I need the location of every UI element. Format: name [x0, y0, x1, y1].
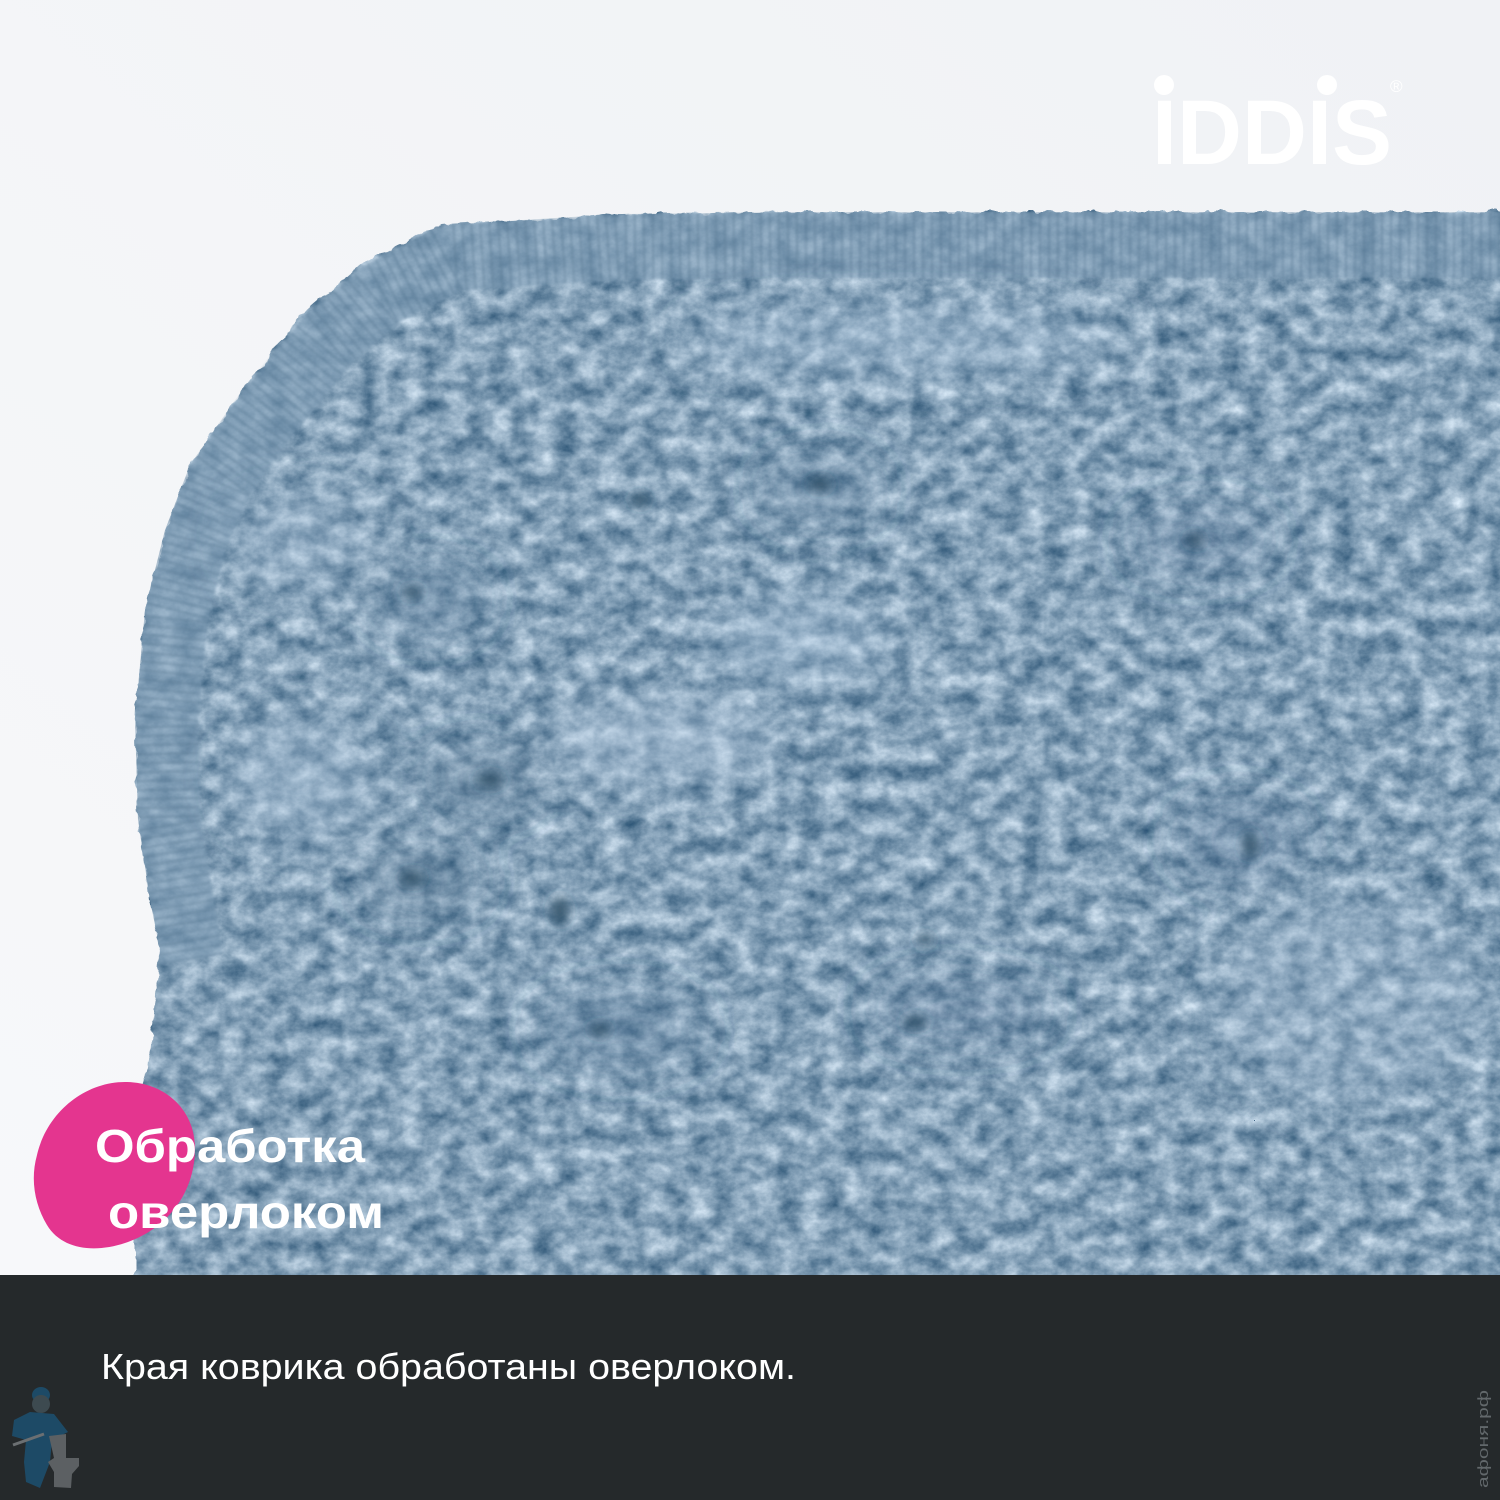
rug photo	[135, 212, 1500, 1290]
heading	[95, 1120, 384, 1238]
heading: оверлоком	[108, 1186, 384, 1238]
pink blob	[34, 1082, 195, 1248]
logo: IDDIS: ®	[1390, 77, 1403, 96]
icon: plumber mascot with toilet	[12, 1387, 79, 1488]
footer panel	[0, 1275, 1500, 1500]
watermark: афоня.рф	[1475, 1390, 1492, 1488]
dark gaps between tufts	[400, 477, 1258, 1036]
heading: Обработка	[95, 1120, 365, 1172]
tonal patches in pile	[230, 310, 1480, 1100]
overlock edge band	[165, 245, 1500, 960]
logo: IDDIS: IDDIS	[1152, 82, 1392, 184]
body text: Края коврика обработаны оверлоком.	[101, 1346, 796, 1387]
